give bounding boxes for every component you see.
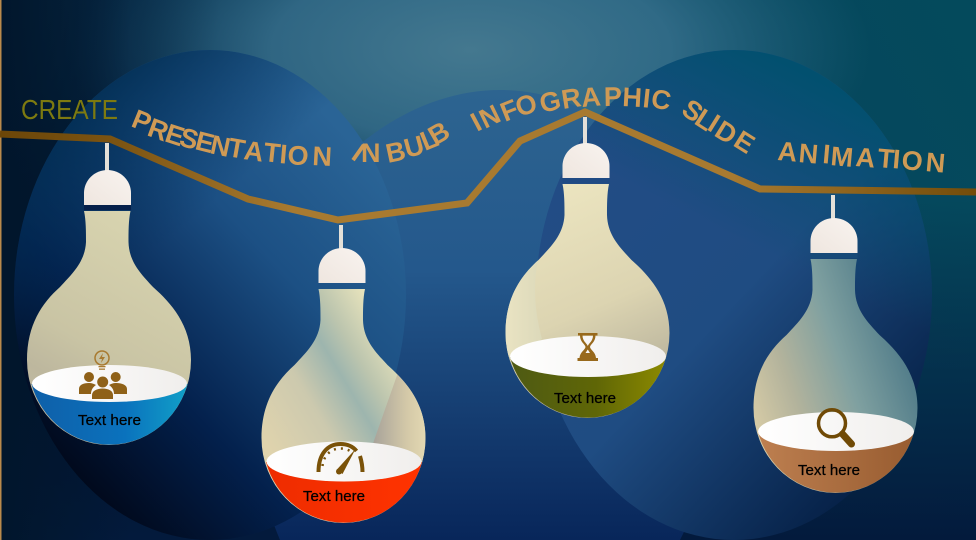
bulb 4: brown — [754, 195, 918, 493]
icon: speedometer — [318, 444, 362, 474]
label: Text here — [303, 488, 365, 505]
bulb stem — [339, 225, 343, 249]
bulb 3: olive — [498, 117, 670, 418]
bowl — [758, 432, 914, 493]
title word: ANIMATION: ANIMATION — [776, 136, 947, 179]
bulb cap — [84, 170, 131, 205]
bulb glass — [27, 211, 191, 445]
title word: INFOGRAPHIC: INFOGRAPHIC — [466, 81, 673, 137]
bulb stem — [831, 195, 835, 219]
title — [21, 81, 947, 179]
bulb cap — [562, 143, 610, 178]
icon: hourglass — [578, 333, 598, 361]
title word: SLIDE: SLIDE — [677, 93, 760, 160]
bulb cap — [318, 248, 366, 283]
bulb glass — [262, 289, 426, 523]
icon: lightbulb and people — [79, 351, 127, 399]
label: Text here — [798, 462, 860, 479]
bulb glass — [506, 184, 670, 418]
title word: IN BULB: INBULB — [347, 115, 455, 169]
title word: PRESENTATION: PRESENTATION — [128, 104, 333, 172]
bowl — [510, 357, 666, 418]
bulb 2: red — [262, 225, 430, 523]
bowl — [266, 462, 422, 523]
hanging wire line — [0, 112, 976, 220]
label: Text here — [78, 412, 141, 429]
bulb cap — [810, 218, 858, 253]
label: Text here — [554, 390, 616, 407]
bulb 1: blue — [27, 143, 191, 445]
icon: magnifier — [818, 410, 852, 444]
bulb glass — [754, 259, 918, 493]
bowl — [32, 384, 188, 445]
bulb stem — [583, 117, 587, 144]
bulb stem — [105, 143, 109, 171]
title word: CREATE: CREATE — [21, 94, 118, 125]
